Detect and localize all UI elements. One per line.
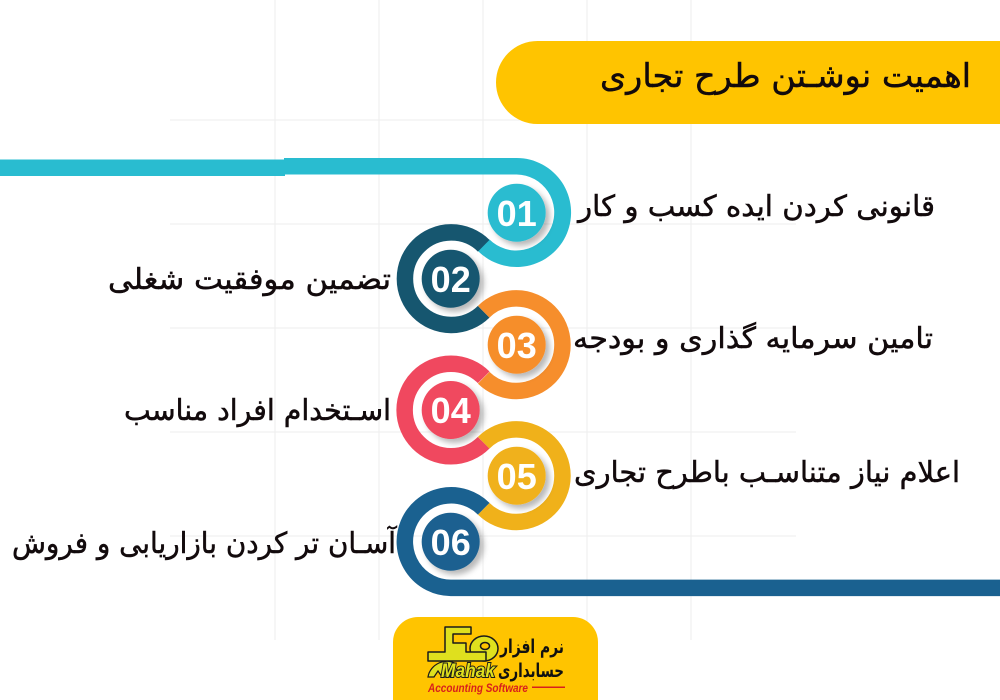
disc 03: [488, 316, 546, 374]
step 01: [0, 158, 935, 267]
label 01: قانونی کردن ایده کسب و کار: [576, 189, 935, 223]
logo badge: [393, 617, 598, 700]
ribbon 06: [405, 495, 1000, 588]
number 06: 06: [431, 522, 471, 563]
step 05: [484, 429, 960, 522]
label 06: آسـان تر کردن بازاریابی و فروش: [12, 525, 398, 560]
logo text line 2: حسابداری: [498, 660, 564, 682]
label 04: اسـتخدام افراد مناسب: [124, 393, 391, 427]
disc 01: [488, 184, 546, 242]
step 06: [12, 495, 1000, 588]
logo text line 1: نرم افزار: [499, 636, 564, 658]
step 03: [484, 298, 933, 391]
number 02: 02: [431, 259, 471, 300]
logo mark: [428, 627, 498, 661]
title text: اهمیت نوشـتن طرح تجاری: [600, 56, 971, 95]
ring 03: [484, 298, 562, 391]
number 05: 05: [497, 456, 537, 497]
disc 06: [422, 513, 480, 571]
label 02: تضمین موفقیت شغلی: [108, 262, 391, 296]
disc 05: [488, 447, 546, 505]
step 04: [124, 364, 484, 456]
title banner: [496, 41, 1000, 124]
disc 02: [422, 250, 480, 308]
step 02: [108, 232, 484, 325]
ring 02: [405, 232, 484, 325]
disc 04: [422, 381, 480, 439]
number 03: 03: [497, 325, 537, 366]
logo wordmark Mahak: Mahak: [441, 661, 496, 682]
ribbon 01: [0, 158, 571, 267]
number 04: 04: [431, 390, 471, 431]
ring 05: [484, 429, 562, 522]
number 01: 01: [497, 193, 537, 234]
ring 04: [405, 364, 484, 456]
label 05: اعلام نیاز متناسـب باطرح تجاری: [574, 455, 960, 489]
logo tagline: Accounting Software: [427, 681, 528, 695]
label 03: تامین سرمایه گذاری و بودجه: [573, 321, 933, 355]
